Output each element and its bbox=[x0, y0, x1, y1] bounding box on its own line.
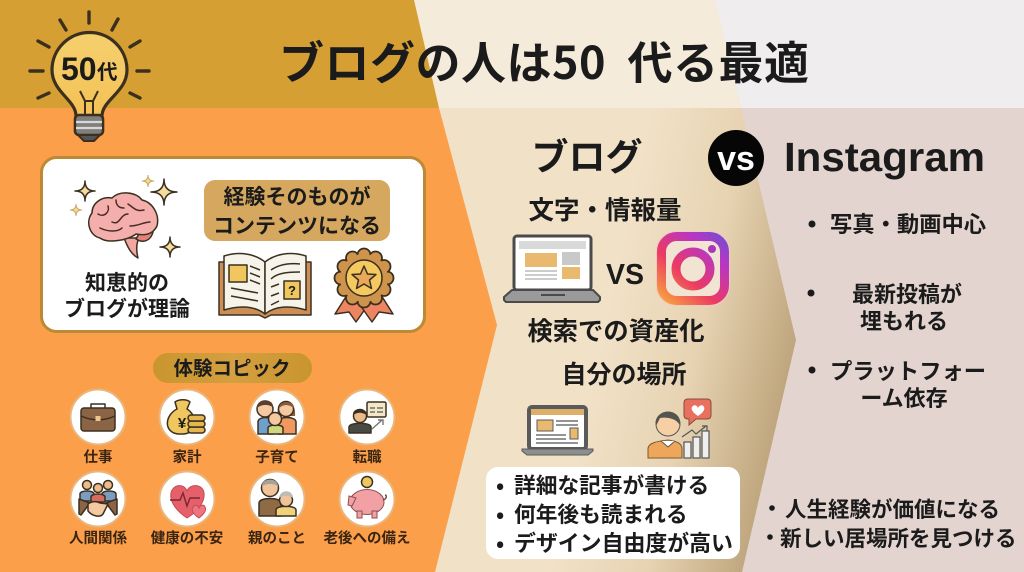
text: intellectual blog label: ブログが理論 bbox=[64, 293, 190, 323]
panel: blog benefits: • bbox=[496, 527, 504, 558]
topic: parents bbox=[248, 472, 306, 548]
topic: retirement savings bbox=[324, 472, 410, 548]
badge: vs bbox=[708, 130, 764, 186]
panel: blog benefits: • bbox=[496, 498, 504, 529]
title: ブログの人は50 代る最適 bbox=[279, 27, 809, 92]
panel: blog benefits: 何年後も読まれる bbox=[514, 498, 688, 529]
heading: experience topics: 体験コピック bbox=[173, 352, 291, 381]
list: Instagram traits bbox=[808, 207, 986, 413]
callout: experience becomes content bbox=[204, 180, 390, 241]
topic: work: 仕事 bbox=[84, 446, 112, 467]
list: Instagram traits: プラットフォー bbox=[830, 354, 986, 386]
list: Instagram traits: 埋もれる bbox=[860, 304, 948, 336]
text: intellectual blog label bbox=[64, 267, 190, 323]
icon: laptop bbox=[504, 236, 600, 302]
panel: intellectual blog bbox=[42, 158, 424, 332]
list: overall takeaways bbox=[767, 493, 1017, 553]
topic: relationships: 人間関係 bbox=[69, 527, 127, 548]
topic: career change: 転職 bbox=[352, 446, 382, 467]
panel: blog benefits: • bbox=[496, 469, 504, 500]
icon: Instagram logo bbox=[656, 231, 730, 306]
topic: retirement savings: 老後への備え bbox=[324, 527, 410, 548]
list: Instagram traits: 最新投稿が bbox=[852, 277, 962, 309]
topic: work bbox=[70, 390, 126, 467]
icon: laptop with article bbox=[522, 407, 593, 455]
text: asset through search: 検索での資産化 bbox=[527, 312, 705, 348]
icon: person with growth chart bbox=[648, 399, 711, 458]
text: text and information volume: 文字・情報量 bbox=[528, 190, 682, 227]
topic: parenting bbox=[250, 390, 304, 467]
heading: Instagram: Instagram bbox=[784, 134, 985, 180]
list: Instagram traits: ーム依存 bbox=[860, 381, 948, 413]
topic: health anxiety: 健康の不安 bbox=[151, 527, 223, 548]
text: intellectual blog label: 知恵的の bbox=[85, 267, 169, 297]
topic: health anxiety bbox=[151, 472, 223, 548]
topic: parenting: 子育て bbox=[255, 446, 299, 467]
panel: blog benefits bbox=[486, 467, 740, 559]
panel: experience topics bbox=[69, 352, 410, 548]
callout: experience becomes content: コンテンツになる bbox=[213, 210, 381, 240]
text: vs: VS bbox=[606, 259, 644, 291]
topic: career change bbox=[340, 390, 394, 467]
topic: relationships bbox=[69, 472, 127, 548]
list: Instagram traits: 写真・動画中心 bbox=[830, 207, 986, 239]
icon: light bulb 50s: 50 bbox=[61, 51, 97, 87]
icon: medal bbox=[334, 248, 394, 322]
list: overall takeaways: 新しい居場所を見つける bbox=[780, 522, 1017, 553]
topic: household budget: ¥ bbox=[178, 415, 187, 432]
topic: household budget bbox=[160, 390, 214, 467]
list: overall takeaways: 人生経験が価値になる bbox=[785, 493, 1000, 524]
icon: light bulb 50s bbox=[30, 12, 149, 141]
topic: parents: 親のこと bbox=[248, 527, 306, 548]
icon: open book bbox=[219, 254, 311, 318]
heading: blog: ブログ bbox=[532, 127, 642, 181]
icon: open book: ? bbox=[288, 283, 296, 298]
panel: blog benefits: デザイン自由度が高い bbox=[514, 527, 733, 558]
heading: experience topics bbox=[153, 352, 312, 383]
icon: light bulb 50s: 代 bbox=[97, 55, 118, 85]
callout: experience becomes content: 経験そのものが bbox=[224, 181, 370, 211]
panel: blog benefits: 詳細な記事が書ける bbox=[514, 469, 709, 500]
badge: vs: vs bbox=[717, 140, 755, 178]
icon: brain with sparkles bbox=[70, 175, 180, 258]
topic: household budget: 家計 bbox=[172, 446, 202, 467]
text: your own place: 自分の場所 bbox=[561, 355, 687, 391]
